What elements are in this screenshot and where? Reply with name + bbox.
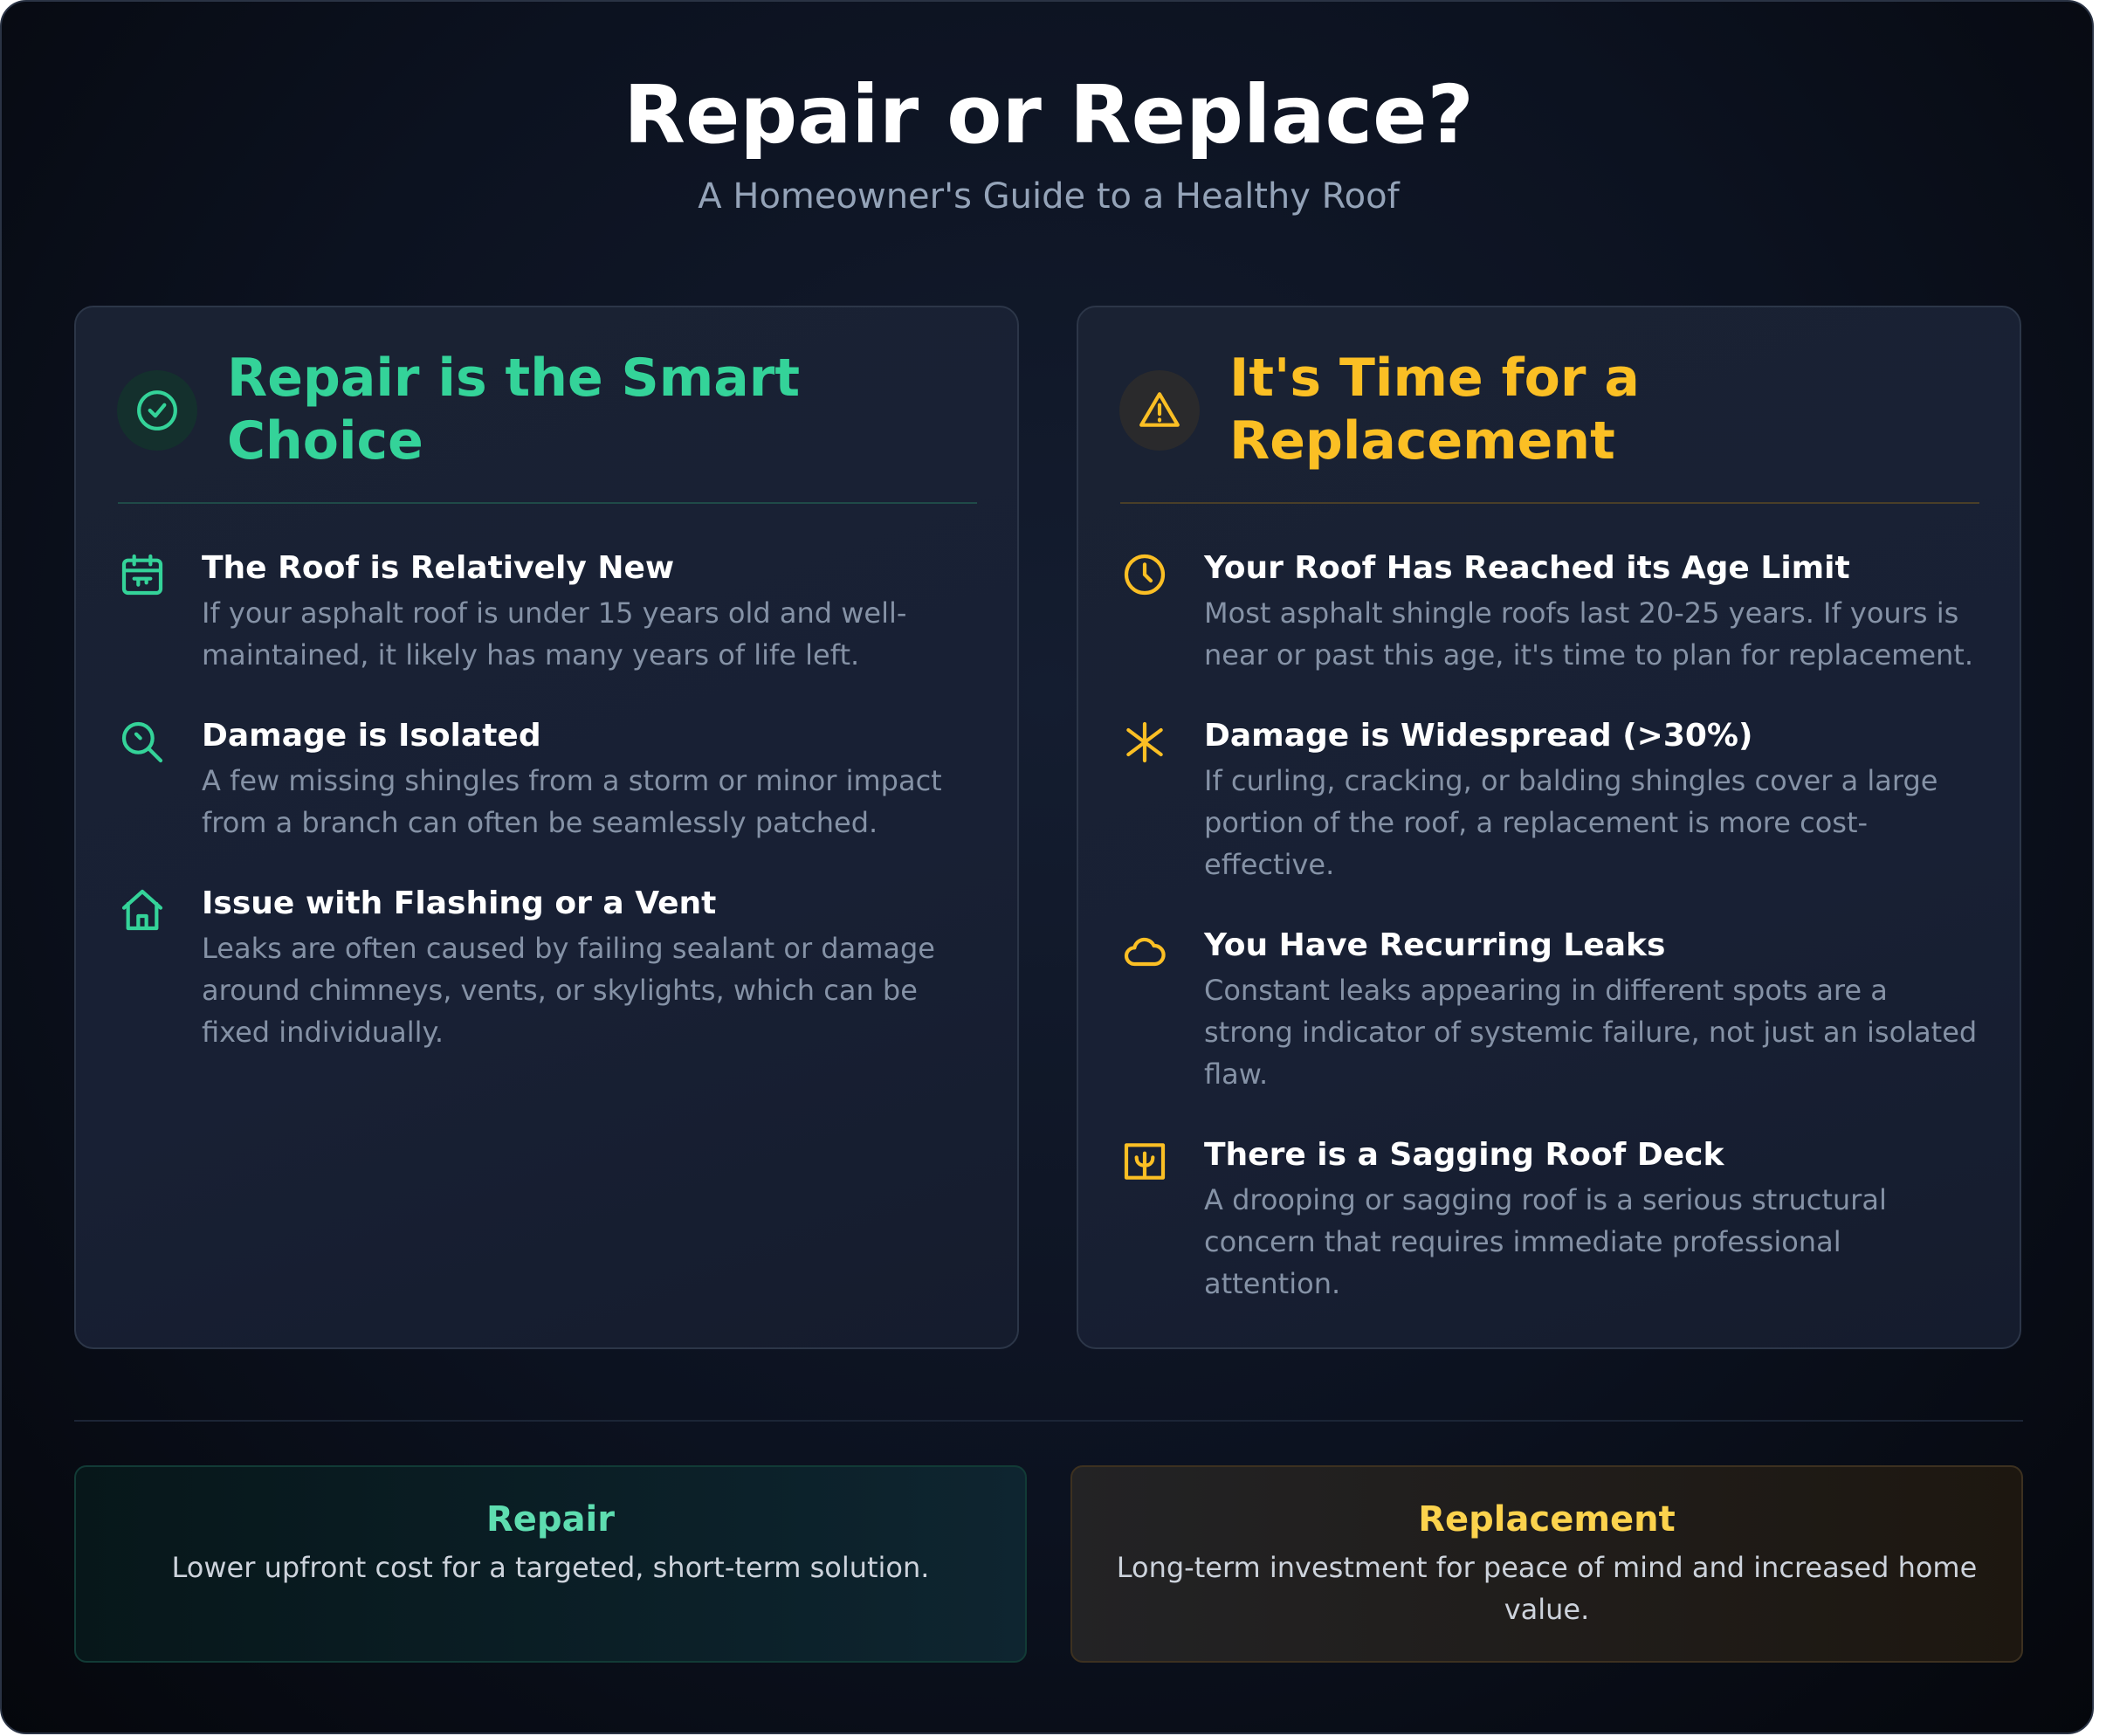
item: relatively new	[122, 550, 906, 672]
panel: repair: Damage is Isolated	[202, 718, 541, 754]
box: repair summary	[74, 1465, 1027, 1663]
box: replacement summary	[1070, 1465, 2023, 1663]
subtitle: A Homeowner's Guide to a Healthy Roof	[698, 176, 1400, 217]
box: replacement summary: Replacement	[1418, 1499, 1676, 1540]
panel: replacement: There is a Sagging Roof Deck	[1204, 1137, 1724, 1173]
heading: repair: Choice	[227, 410, 423, 472]
item: damage isolated	[122, 718, 942, 839]
panel: replacement: Your Roof Has Reached its Age Limit	[1204, 550, 1850, 586]
panel: replacement: Constant leaks appearing in different spots are a strong indicator of systemic failure, not just an isolated flaw.	[1204, 974, 1977, 1091]
panel: replacement	[1077, 306, 2021, 1349]
heading: replacement: It's Time for a	[1229, 348, 1640, 409]
panel: replacement: Most asphalt shingle roofs last 20-25 years. If yours is near or past this age, it's time to plan for replacement.	[1204, 596, 1973, 672]
icon: check circle	[117, 370, 197, 451]
panel: replacement: Damage is Widespread (>30%)	[1204, 718, 1752, 754]
item: age limit	[1125, 550, 1973, 672]
panel: repair: Issue with Flashing or a Vent	[202, 885, 716, 921]
panel: replacement: You Have Recurring Leaks	[1204, 927, 1665, 963]
panel: replacement: A drooping or sagging roof is a serious structural concern that requires immediate professional attention.	[1204, 1183, 1887, 1300]
box: replacement summary: Long-term investment for peace of mind and increased home value.	[1117, 1551, 1977, 1626]
heading: repair	[227, 348, 800, 472]
icon: warning	[1119, 370, 1200, 451]
heading: replacement: Replacement	[1229, 410, 1615, 472]
item: recurring leaks	[1125, 927, 1977, 1091]
heading: repair: Repair is the Smart	[227, 348, 800, 409]
item: widespread	[1126, 718, 1937, 881]
box: repair summary: Lower upfront cost for a targeted, short-term solution.	[172, 1551, 929, 1584]
item: sagging deck	[1125, 1137, 1887, 1300]
panel: repair: If your asphalt roof is under 15 years old and well-maintained, it likely has many years of life left.	[202, 596, 906, 672]
panel: repair	[74, 306, 1019, 1349]
panel: repair: The Roof is Relatively New	[202, 550, 674, 586]
title: Repair or Replace?	[623, 68, 1474, 162]
heading: replacement	[1229, 348, 1640, 472]
panel: repair: A few missing shingles from a storm or minor impact from a branch can often be seamlessly patched.	[202, 764, 942, 839]
panel: repair: Leaks are often caused by failing sealant or damage around chimneys, vents, or skylights, which can be fixed individually.	[202, 932, 935, 1049]
item: flashing vent	[122, 885, 935, 1049]
box: repair summary: Repair	[486, 1499, 615, 1540]
panel: replacement: If curling, cracking, or balding shingles cover a large portion of the roof, a replacement is more cost-effective.	[1204, 764, 1937, 881]
